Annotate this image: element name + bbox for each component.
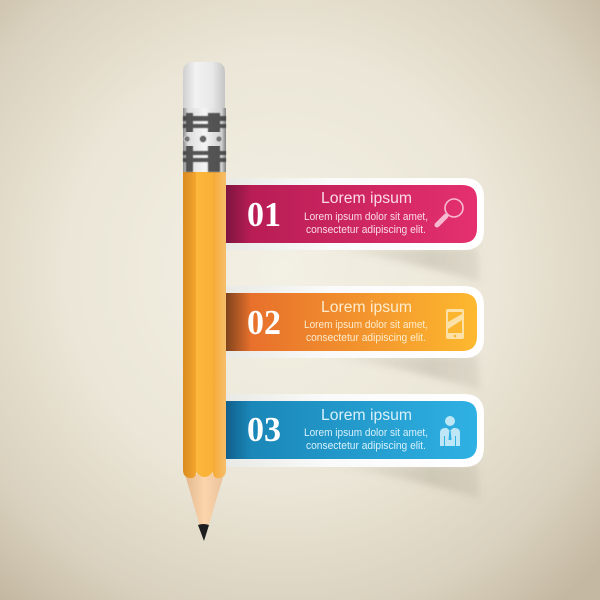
band 1 heading: Lorem ipsum — [321, 190, 412, 207]
pencil — [183, 62, 226, 541]
band 1 body text — [304, 211, 428, 236]
icon: businessman — [440, 416, 460, 446]
band 3 number: 03 — [247, 410, 281, 449]
icon: magnifying glass — [437, 199, 463, 225]
band 3 — [226, 394, 484, 499]
band 1 number: 01 — [247, 195, 281, 234]
band 2 — [226, 286, 484, 390]
band 3 colour panel — [226, 401, 477, 459]
band 3 white paper — [226, 394, 484, 467]
band 2 body text — [304, 319, 428, 344]
band 3 body text: Lorem ipsum dolor sit amet, — [304, 427, 428, 439]
band 1 colour panel — [226, 185, 477, 243]
band 1 body text: Lorem ipsum dolor sit amet, — [304, 211, 428, 223]
pencil eraser — [183, 62, 225, 108]
band 1 body text: consectetur adipiscing elit. — [306, 224, 426, 236]
band 2 body text: consectetur adipiscing elit. — [306, 332, 426, 344]
band 2 heading: Lorem ipsum — [321, 299, 412, 316]
pencil ferrule — [183, 108, 226, 172]
icon: smartphone — [446, 309, 464, 339]
band 1 — [226, 178, 484, 282]
band 2 colour panel — [226, 293, 477, 351]
band 2 shadow — [320, 356, 480, 390]
band 3 shadow — [320, 465, 480, 499]
band 3 body text — [304, 427, 428, 452]
band 1 shadow — [320, 248, 480, 282]
band 3 body text: consectetur adipiscing elit. — [306, 440, 426, 452]
pencil body — [183, 170, 226, 478]
band 1 white paper — [226, 178, 484, 250]
band 2 white paper — [226, 286, 484, 358]
band 3 heading: Lorem ipsum — [321, 407, 412, 424]
pencil lead — [198, 524, 209, 541]
band 2 number: 02 — [247, 303, 281, 342]
pencil wood tip — [185, 474, 224, 541]
band 2 body text: Lorem ipsum dolor sit amet, — [304, 319, 428, 331]
